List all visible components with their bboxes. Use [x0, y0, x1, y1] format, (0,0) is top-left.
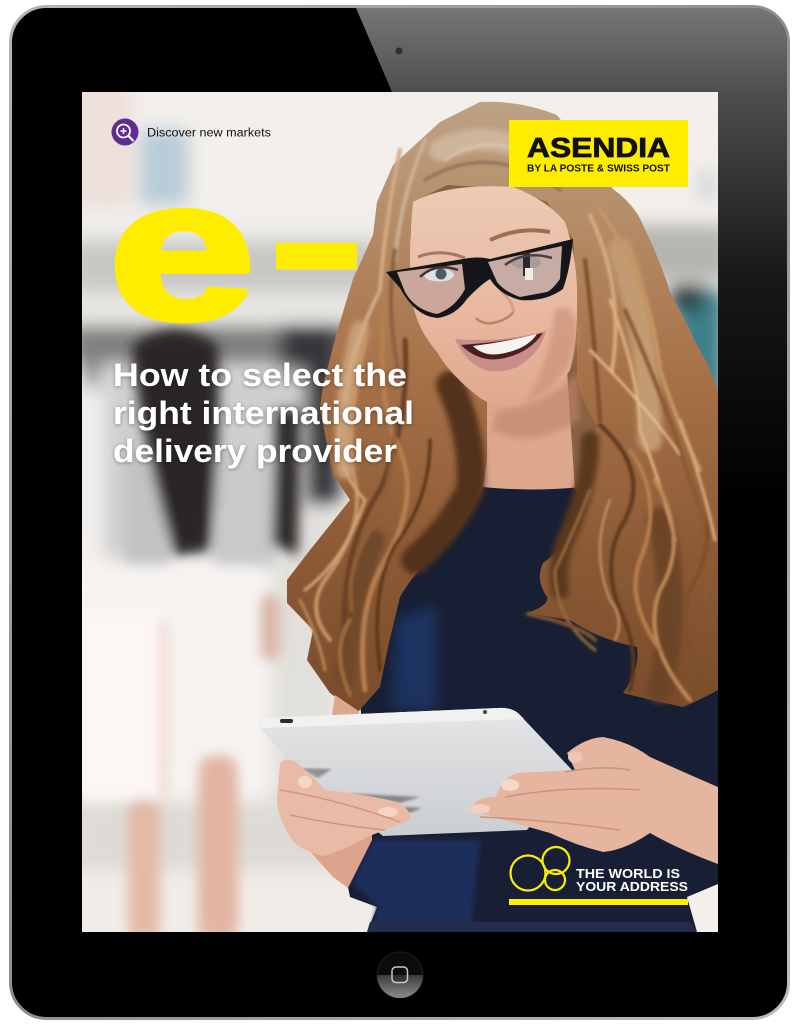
eyes	[424, 268, 454, 282]
panel: report cover	[70, 82, 730, 940]
large e- wordmark: e	[108, 137, 255, 361]
woman: left hand	[277, 760, 410, 856]
hair soft shading	[344, 140, 670, 690]
cover photo	[70, 82, 730, 940]
lens right	[488, 246, 562, 297]
woman: hair underlayer behind face	[410, 185, 597, 490]
tagline with circles logo	[509, 847, 688, 905]
woman: neck	[483, 374, 575, 490]
front camera	[396, 48, 402, 54]
woman: mouth	[455, 331, 546, 371]
circles logo	[510, 847, 570, 890]
hair strands	[300, 140, 715, 700]
title	[113, 357, 414, 469]
Asendia logo: ASENDIA	[527, 132, 670, 163]
woman: hair	[287, 102, 718, 713]
cheek shading	[525, 308, 577, 405]
eyebrows	[418, 253, 465, 258]
blurred store background	[82, 92, 718, 875]
screen gloss reflection	[356, 8, 787, 426]
woman: face	[410, 186, 580, 438]
discover label: Discover new markets	[147, 128, 271, 140]
tagline with circles logo: YOUR ADDRESS	[576, 879, 688, 894]
woman: glasses	[386, 239, 573, 318]
title: delivery provider	[113, 433, 397, 469]
title: How to select the	[113, 357, 407, 393]
woman: tablet	[258, 708, 572, 836]
woman: left upper arm	[332, 695, 360, 715]
tagline with circles logo: THE WORLD IS	[576, 866, 680, 881]
finger shadows	[300, 768, 332, 778]
woman: left forearm	[310, 835, 372, 888]
Asendia logo	[509, 120, 688, 187]
woman: dress	[348, 487, 718, 932]
blurred shopper	[82, 330, 300, 940]
home button	[377, 952, 423, 998]
lens left	[397, 264, 465, 314]
discover icon	[112, 118, 138, 146]
large e- wordmark: -	[264, 113, 370, 362]
woman: right hand	[470, 737, 718, 864]
large e- wordmark	[114, 208, 357, 324]
title: right international	[113, 395, 414, 431]
Asendia logo: BY LA POSTE & SWISS POST	[527, 162, 671, 174]
nose	[476, 312, 513, 323]
